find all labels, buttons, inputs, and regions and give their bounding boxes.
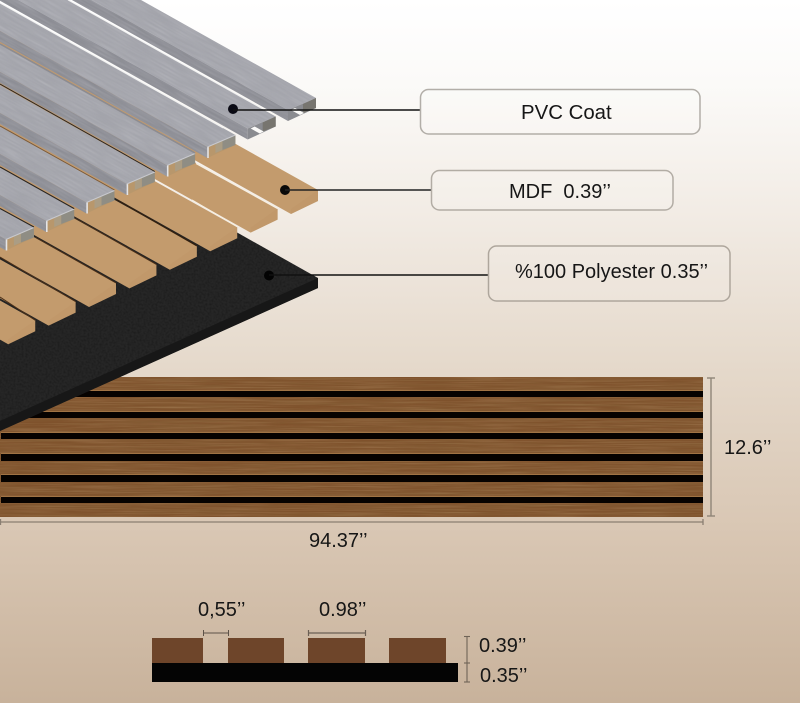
exploded layers xyxy=(0,0,318,431)
label: felt thickness: 0.35’’ xyxy=(480,665,527,687)
dimension: slat width xyxy=(308,630,366,636)
callout: polyester xyxy=(488,246,730,301)
layer: polyester felt xyxy=(0,198,318,431)
height label: 12.6’’ xyxy=(724,437,771,459)
label: gap: 0,55’’ xyxy=(198,599,245,621)
callout leader: PVC Coat xyxy=(228,104,420,114)
callout: PVC Coat: PVC Coat xyxy=(521,102,612,124)
callout: MDF: MDF 0.39’’ xyxy=(509,181,611,203)
felt backing xyxy=(152,663,458,682)
dimension: thickness xyxy=(464,636,470,682)
cross-section diagram xyxy=(152,599,527,687)
label: slat width: 0.98’’ xyxy=(319,599,366,621)
callout: polyester: %100 Polyester 0.35’’ xyxy=(515,261,708,283)
label: MDF thickness: 0.39’’ xyxy=(479,635,526,657)
width dimension line xyxy=(0,519,703,525)
layer: grey PVC coated strips xyxy=(0,0,316,250)
dimension: slat gap xyxy=(203,630,228,636)
wood panel front view xyxy=(0,377,703,517)
callout leader: MDF xyxy=(280,185,431,195)
layer: MDF strips xyxy=(0,0,318,344)
callout: PVC Coat xyxy=(420,90,700,134)
callout: MDF xyxy=(432,170,673,210)
callout leader: polyester xyxy=(264,270,488,280)
height dimension line xyxy=(707,378,715,516)
width label: 94.37’’ xyxy=(309,530,368,552)
slat blocks xyxy=(152,638,446,663)
